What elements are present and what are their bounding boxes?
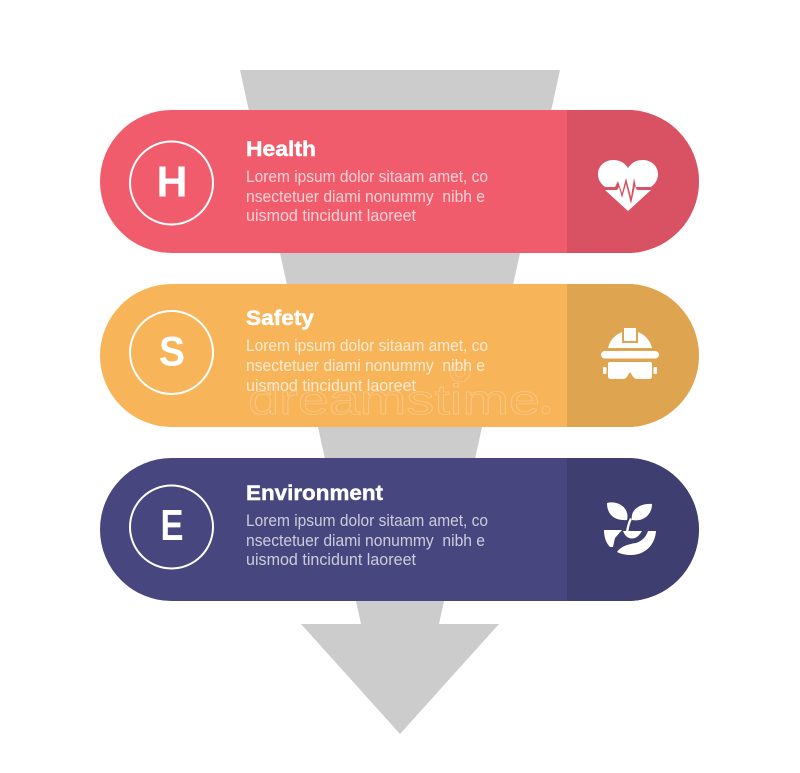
watermark [248,362,550,423]
health body text: nsectetuer diami nonummy nibh e [246,188,485,206]
environment body text: nsectetuer diami nonummy nibh e [246,532,485,550]
safety letter circle [130,311,213,394]
watermark: dreamstime [248,376,540,423]
environment letter circle: E [160,501,184,550]
health heading: Health [246,137,316,161]
safety letter circle: S [159,328,185,374]
safety body text: nsectetuer diami nonummy nibh e [246,357,485,375]
environment pill background [100,458,699,601]
health pill background [100,110,699,253]
environment body text: Lorem ipsum dolor sitaam amet, co [246,512,488,530]
panel: safety [100,284,699,427]
health body text: uismod tincidunt laoreet [246,207,416,225]
icon: hard hat and goggles [601,328,659,379]
icon: heart with pulse [598,160,658,211]
health body text: Lorem ipsum dolor sitaam amet, co [246,168,488,186]
icon: plant in hand [604,502,656,555]
safety icon panel [567,284,699,427]
environment icon panel [567,458,699,601]
safety heading: Safety [246,306,314,330]
safety body text [246,337,488,395]
environment letter circle [130,486,213,568]
panel: environment [100,458,699,601]
health icon panel [567,110,699,253]
environment heading: Environment [246,481,383,505]
health letter circle [130,142,213,224]
funnel arrow [240,70,560,734]
safety body text: Lorem ipsum dolor sitaam amet, co [246,337,488,355]
environment body text [246,512,488,569]
safety body text: uismod tincidunt laoreet [246,377,416,395]
environment body text: uismod tincidunt laoreet [246,551,416,569]
panel: health [100,110,699,253]
health body text [246,168,488,225]
health letter circle: H [156,158,188,206]
safety pill background [100,284,699,427]
